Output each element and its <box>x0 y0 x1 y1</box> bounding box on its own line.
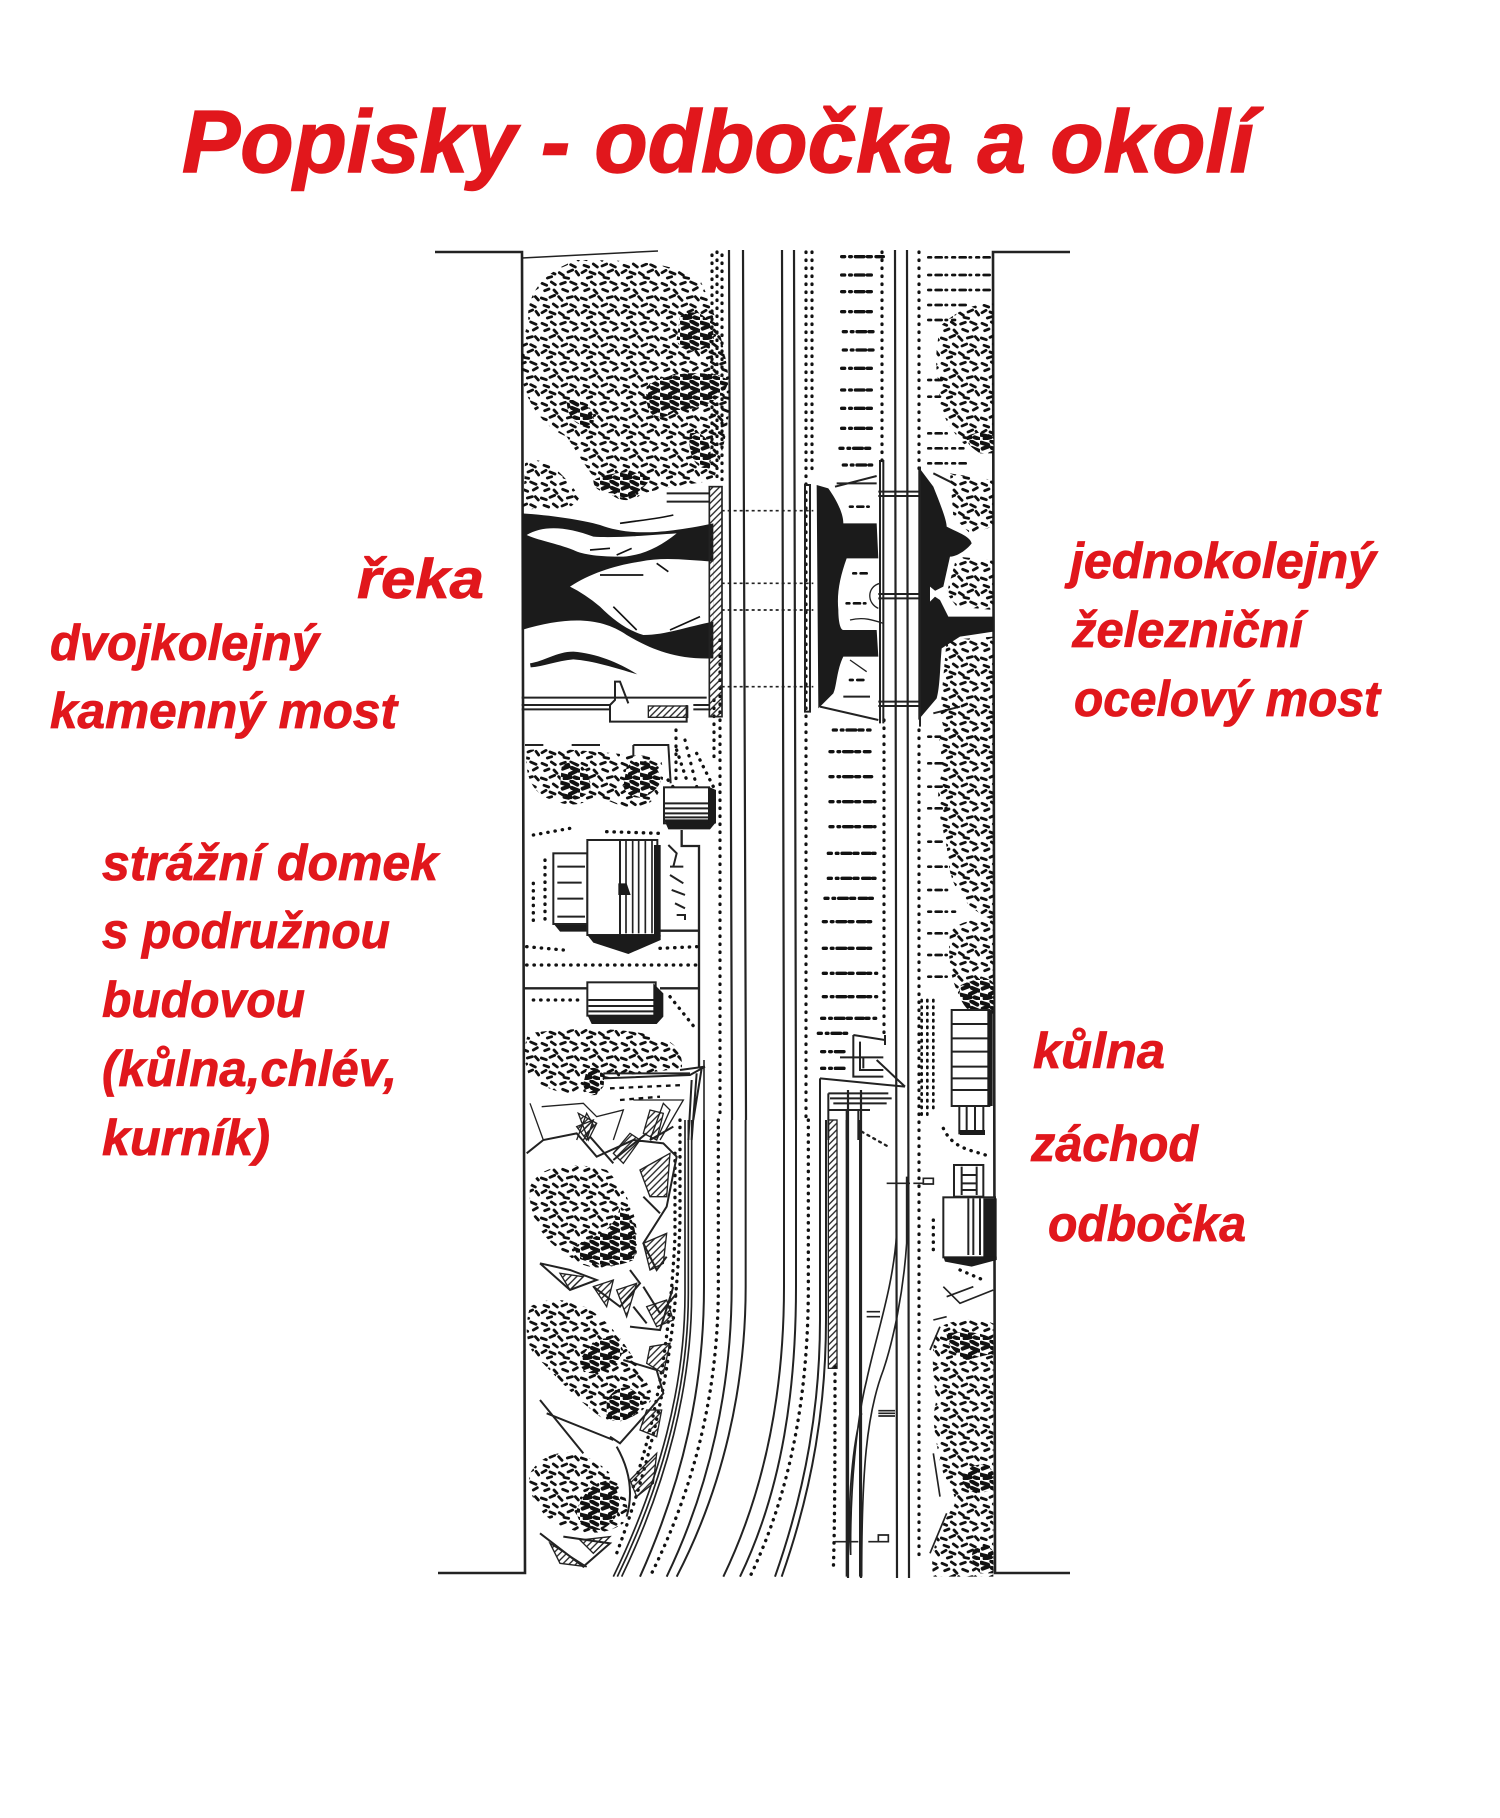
dotted bridge cross lines <box>722 511 813 687</box>
label: dvojkolejný kamenný most: kamenný most <box>50 683 399 739</box>
foliage beside right bridge <box>940 473 993 740</box>
label: strážní domek s podružnou budovou: strážní domek <box>102 835 440 891</box>
bush above rock wall <box>525 1029 682 1095</box>
shed at garden top <box>664 787 716 829</box>
label: jednokolejný železniční ocelový most: jednokolejný <box>1064 533 1378 589</box>
lower section <box>527 1120 997 1577</box>
label: strážní domek s podružnou budovou: budovou <box>102 972 305 1028</box>
label: strážní domek s podružnou budovou: (kůlna,chlév, <box>102 1041 397 1097</box>
tall shed (kůlna) <box>952 1010 993 1135</box>
label: strážní domek s podružnou budovou <box>102 835 440 1166</box>
curved tracks <box>613 1120 907 1577</box>
guard house <box>553 840 699 954</box>
label: záchod: záchod <box>1030 1116 1199 1172</box>
trees lower left <box>527 1165 653 1533</box>
fence strip <box>828 1120 837 1368</box>
outbuilding shed <box>587 982 663 1024</box>
boundary line <box>523 985 699 992</box>
trees: right strip upper <box>936 303 993 453</box>
middle section <box>523 727 993 1140</box>
panel: railway plan drawing <box>435 250 1070 1578</box>
short dash rows beside right trees <box>928 737 957 977</box>
label: jednokolejný železniční ocelový most: železniční <box>1071 602 1309 658</box>
bush: small bush by river <box>523 460 580 510</box>
sleepers upper <box>840 257 883 465</box>
tree: large tree top left <box>522 260 730 500</box>
right tree strip middle <box>938 727 993 1020</box>
curved ballast dots <box>617 1120 835 1577</box>
label: jednokolejný železniční ocelový most: ocelový most <box>1074 671 1382 727</box>
label: strážní domek s podružnou budovou: s podružnou <box>102 903 390 959</box>
rock hatching <box>550 1120 673 1567</box>
lower right trees <box>930 1287 993 1577</box>
small signal hut <box>820 1035 905 1140</box>
upper section <box>522 257 993 740</box>
drawing frame <box>435 251 1070 1573</box>
dense dotted strip <box>922 1000 933 1117</box>
garden plants <box>668 845 685 920</box>
rocks upper <box>530 1085 683 1140</box>
river with islands <box>522 513 713 674</box>
label: dvojkolejný kamenný most: dvojkolejný <box>50 615 321 671</box>
label: řeka: řeka <box>357 547 484 610</box>
right scattered dots <box>933 1128 990 1280</box>
garden path lines <box>682 830 699 1067</box>
retaining wall top <box>603 1067 705 1140</box>
label: jednokolejný železniční ocelový most <box>1064 533 1382 727</box>
stone bridge <box>522 487 722 722</box>
garden bushes <box>525 745 671 807</box>
label: strážní domek s podružnou budovou: kurník) <box>102 1110 270 1166</box>
switch signals <box>835 1132 933 1542</box>
steel railway bridge <box>805 460 993 727</box>
left rocks <box>527 1127 677 1567</box>
title: Popisky - odbočka a okolí <box>182 92 1263 191</box>
short dash rows right of track <box>928 257 992 463</box>
label: dvojkolejný kamenný most <box>50 615 399 739</box>
label: kůlna: kůlna <box>1033 1023 1165 1079</box>
dotted ballast edges <box>668 252 919 1560</box>
outhouse and toilet block (záchod) <box>943 1165 997 1267</box>
railway tracks straight section <box>704 250 909 1578</box>
dark foliage right upper <box>967 433 993 453</box>
label: odbočka: odbočka <box>1048 1196 1246 1252</box>
sleepers lower <box>818 730 877 1068</box>
scattered garden dots <box>527 750 713 1030</box>
